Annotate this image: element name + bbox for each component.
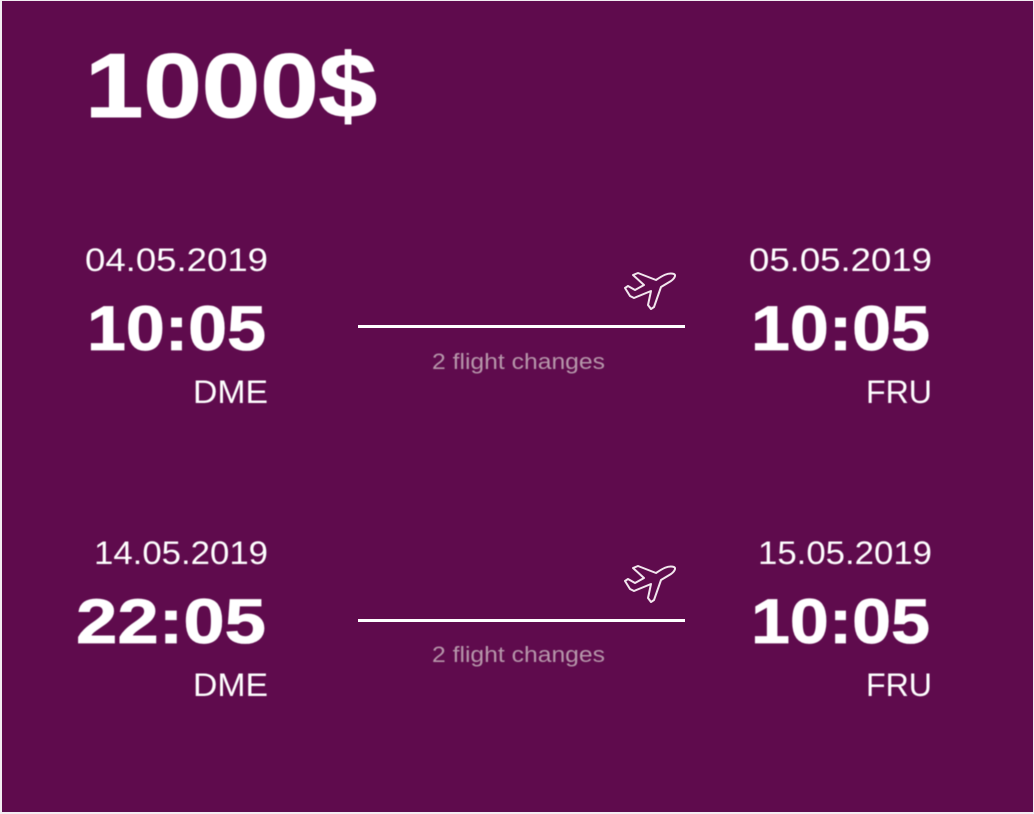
outbound arrival time: 10:05 [751, 294, 930, 364]
return arrival date: 15.05.2019 [758, 535, 932, 571]
return departure airport: DME [193, 667, 268, 703]
icon: outbound plane [625, 273, 675, 309]
panel: outbound flight [85, 242, 932, 410]
outbound departure date: 04.05.2019 [85, 242, 268, 278]
outbound flight changes note: 2 flight changes [432, 349, 605, 374]
return flight changes note: 2 flight changes [432, 642, 605, 667]
outbound arrival date: 05.05.2019 [749, 242, 932, 278]
price heading: 1000$ [85, 36, 377, 137]
return departure date: 14.05.2019 [94, 535, 268, 571]
return route line [358, 619, 685, 622]
panel: return flight [76, 535, 932, 703]
outbound departure airport: DME [193, 374, 268, 410]
outbound route line [358, 325, 685, 328]
outbound departure time: 10:05 [87, 294, 266, 364]
return arrival time: 10:05 [751, 587, 930, 657]
return departure time: 22:05 [76, 587, 266, 657]
outbound arrival airport: FRU [866, 374, 932, 410]
return arrival airport: FRU [866, 667, 932, 703]
icon: return plane [625, 566, 675, 602]
